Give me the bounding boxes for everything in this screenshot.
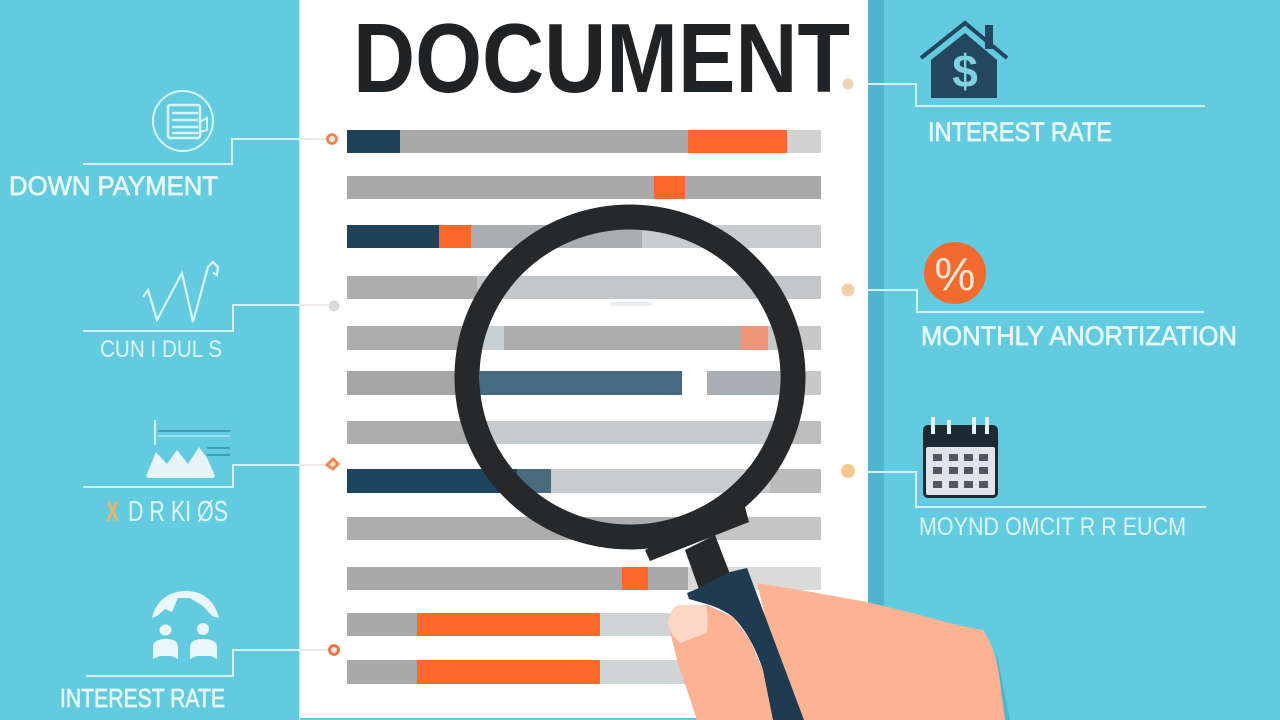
- row 1: [347, 130, 821, 153]
- row 3: [347, 225, 821, 248]
- row 12: [347, 660, 692, 684]
- magnifying lens ring: [467, 217, 793, 537]
- row 8: [347, 469, 821, 493]
- row 6: [347, 371, 821, 395]
- marker dot: [328, 134, 336, 144]
- icon: percent badge: %: [935, 248, 975, 300]
- magnifier handle: [687, 568, 804, 720]
- icon: house with dollar: [921, 23, 1007, 98]
- row 11: [347, 613, 692, 636]
- fingernail: [668, 605, 708, 643]
- marker dot: [841, 464, 855, 478]
- callout: down payment: [9, 91, 336, 201]
- title: DOCUMENT: [353, 3, 850, 113]
- label: X: [106, 496, 119, 528]
- row 7: [347, 421, 821, 444]
- document rows: [347, 130, 821, 684]
- callout: interest rate right: [842, 23, 1205, 147]
- label: INTEREST RATE: [928, 117, 1112, 147]
- label: CUN I DUL S: [100, 336, 222, 363]
- callout: monthly amortization: [842, 242, 1237, 351]
- icon: house with dollar: $: [952, 45, 978, 97]
- connector: [86, 650, 300, 676]
- connector: [83, 139, 300, 164]
- callout: interest rate left: [60, 591, 338, 713]
- marker dot: [842, 78, 854, 90]
- callout: third left item: D R KI ØS: [128, 496, 228, 528]
- finger: [668, 605, 778, 720]
- icon: document in circle: [153, 91, 213, 151]
- marker dot: [328, 300, 340, 312]
- label: MOYND OMCIT R R EUCM: [919, 513, 1186, 541]
- icon: line chart: [143, 262, 218, 322]
- marker dot: [842, 284, 854, 296]
- row 2: [347, 176, 821, 199]
- icon: people under dome: [152, 591, 219, 659]
- icon: mountain chart: [146, 420, 230, 478]
- hand palm: [757, 583, 1005, 720]
- row 5: [347, 326, 821, 350]
- hand with magnifying glass: [467, 217, 1010, 720]
- magnifier collar and neck: [645, 507, 749, 592]
- icon: percent badge: [924, 242, 986, 304]
- connector: [868, 290, 1204, 312]
- row 10: [347, 567, 821, 590]
- callout: second left item: [83, 262, 340, 363]
- connector: [83, 305, 300, 331]
- connector: [83, 465, 300, 487]
- marker dot: [327, 459, 338, 469]
- callout: third left item: [83, 420, 338, 528]
- label: INTEREST RATE: [60, 683, 225, 713]
- connector: [868, 472, 1206, 507]
- row 4: [347, 276, 821, 306]
- marker dot: [330, 646, 338, 654]
- connector: [868, 84, 1205, 106]
- hand shadow: [996, 650, 1010, 720]
- label: DOWN PAYMENT: [9, 171, 218, 201]
- panel: document page: [300, 0, 868, 718]
- icon: calendar: [923, 417, 998, 498]
- row 9: [347, 517, 821, 540]
- callout: monthly calendar: [841, 417, 1206, 541]
- label: MONTHLY ANORTIZATION: [921, 321, 1237, 351]
